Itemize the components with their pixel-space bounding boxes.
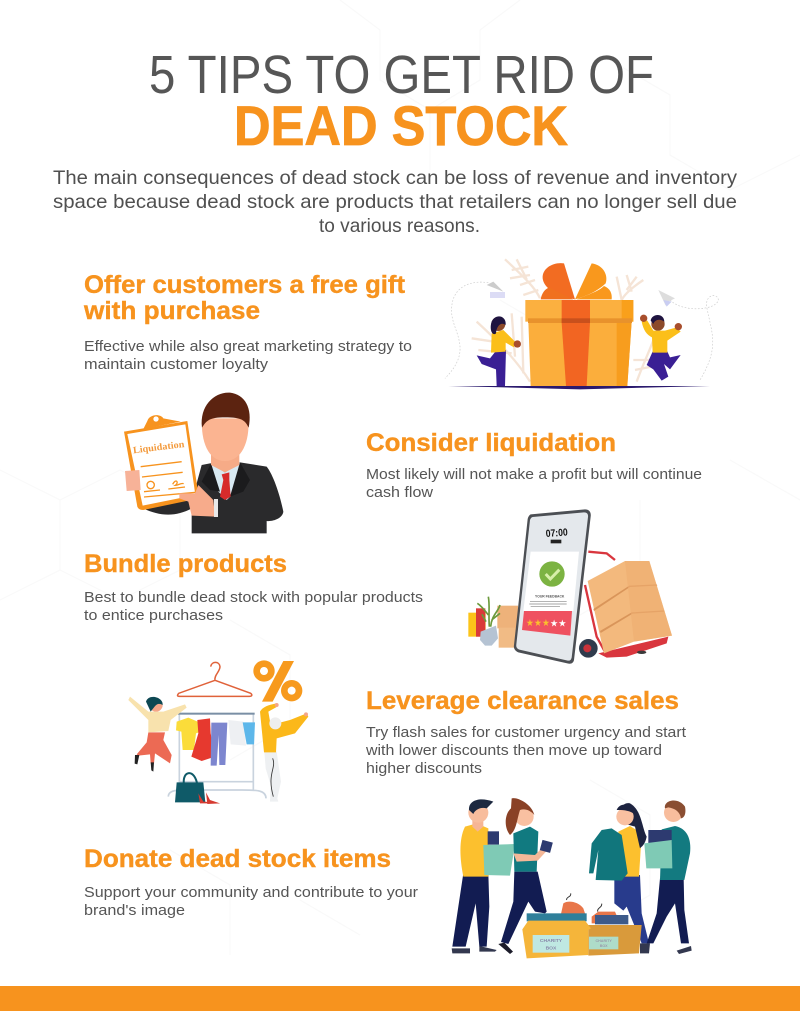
rack xyxy=(168,714,266,798)
plant xyxy=(477,597,500,627)
title xyxy=(149,45,654,157)
woman left xyxy=(498,798,553,954)
tip 1: free gift text: Effective while also great marketing strategy to xyxy=(84,339,412,355)
tip 3: bundle text xyxy=(84,550,423,624)
tip 4: clearance text xyxy=(365,687,686,777)
bow xyxy=(543,263,575,299)
time: 07:00 xyxy=(545,527,568,540)
tip 2: liquidation text: Consider liquidation xyxy=(366,429,616,457)
tip 5: donate text: Support your community and contribute to your xyxy=(84,885,418,901)
icon: businessman holding liquidation clipboard xyxy=(124,393,283,533)
clipboard xyxy=(124,421,199,510)
charity boxes: BOX xyxy=(546,945,557,951)
tip 4: clearance text: higher discounts xyxy=(366,761,482,777)
woman right xyxy=(260,703,308,802)
intro paragraph xyxy=(53,167,737,237)
small boxes xyxy=(497,606,518,648)
paper planes xyxy=(487,282,675,307)
title: 5 TIPS TO GET RID OF xyxy=(149,45,654,105)
tip 3: bundle text: Bundle products xyxy=(84,550,287,578)
intro paragraph: space because dead stock are products that retailers can no longer sell due xyxy=(53,191,737,213)
small gift xyxy=(468,608,486,637)
percent xyxy=(253,660,302,702)
tip 5: donate text xyxy=(84,845,418,919)
hanger xyxy=(178,662,252,696)
intro paragraph: to various reasons. xyxy=(319,215,480,237)
phone xyxy=(514,509,591,664)
man right xyxy=(640,800,692,954)
tip 2: liquidation text xyxy=(366,429,702,501)
icon: clearance rack, hanger, percent and shoppers xyxy=(128,660,308,804)
box label: CHARITY xyxy=(540,938,563,944)
woman left xyxy=(128,697,187,772)
tip 3: bundle text: to entice purchases xyxy=(84,608,223,624)
intro paragraph: The main consequences of dead stock can be loss of revenue and inventory xyxy=(53,167,737,189)
tip 5: donate text: brand's image xyxy=(84,903,185,919)
bag and shoes xyxy=(175,782,205,802)
title: DEAD STOCK xyxy=(234,94,568,157)
boxes xyxy=(588,561,672,653)
tip 4: clearance text: Try flash sales for customer urgency and start xyxy=(366,725,686,741)
bag right xyxy=(644,830,672,868)
suit xyxy=(192,462,283,533)
tip 2: liquidation text: Most likely will not make a profit but will continue xyxy=(366,467,702,483)
tip 1: free gift text: Offer customers a free gift xyxy=(84,271,406,299)
charity boxes: BOX xyxy=(600,944,608,948)
icon: phone with feedback and hand truck of boxes: ★★★ xyxy=(526,618,550,629)
tip 3: bundle text: Best to bundle dead stock with popular products xyxy=(84,590,423,606)
small box label: CHARITY xyxy=(596,939,612,943)
person right xyxy=(640,315,682,381)
icon: people donating to charity boxes xyxy=(452,798,692,958)
tip 5: donate text: Donate dead stock items xyxy=(84,845,391,873)
charity boxes xyxy=(522,893,642,958)
tip 1: free gift text: maintain customer loyalty xyxy=(84,357,269,373)
man left xyxy=(452,799,497,953)
woman right xyxy=(589,803,649,943)
check badge xyxy=(539,561,565,587)
clothes xyxy=(176,718,203,750)
rating xyxy=(522,611,572,636)
hands xyxy=(125,470,141,491)
tip 4: clearance text: with lower discounts then move up toward xyxy=(365,743,662,759)
icon: phone with feedback and hand truck of boxes: YOUR FEEDBACK xyxy=(535,594,565,598)
icon: gift box with two people xyxy=(445,259,718,389)
footer bar xyxy=(0,986,800,1011)
person left xyxy=(477,316,521,386)
tip 4: clearance text: Leverage clearance sales xyxy=(366,687,679,715)
clipboard heading: Liquidation xyxy=(132,439,186,456)
box xyxy=(528,322,632,386)
bag left xyxy=(483,831,515,876)
tip 1: free gift text xyxy=(83,271,412,373)
tip 1: free gift text: with purchase xyxy=(83,297,260,325)
hand truck xyxy=(585,552,615,655)
icon: phone with feedback and hand truck of boxes xyxy=(468,509,672,664)
tip 2: liquidation text: cash flow xyxy=(366,485,434,501)
head xyxy=(211,445,239,472)
icon: phone with feedback and hand truck of boxes: ★★ xyxy=(550,619,567,630)
